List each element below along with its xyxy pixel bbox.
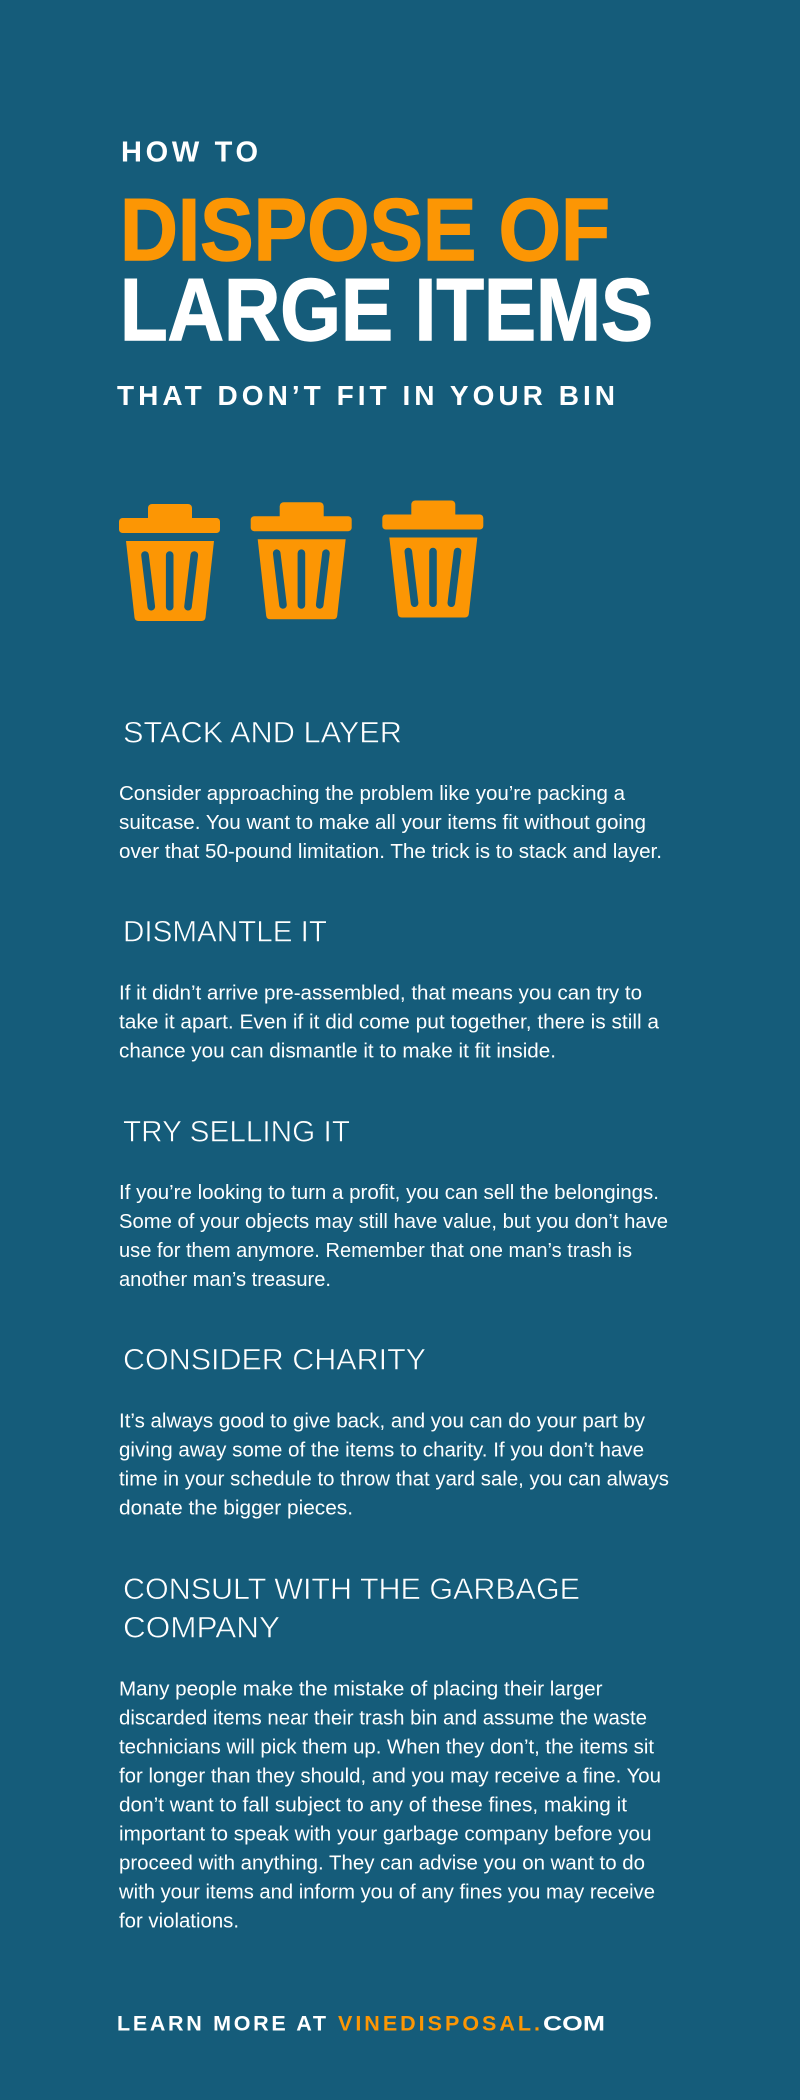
section: consider charity: [119, 1343, 669, 1519]
icon: trash bin 1: [119, 504, 220, 621]
icon: trash bin 3: [382, 500, 483, 618]
body text: Many people make the mistake of placing their larger: [119, 1678, 603, 1700]
body text: with your items and inform you of any fines you may receive: [118, 1881, 655, 1903]
icon: trash bin 2: [251, 502, 352, 619]
body text: important to speak with your garbage company before you: [119, 1823, 652, 1845]
title: how to: HOW TO: [121, 137, 258, 169]
body text: proceed with anything. They can advise you on want to do: [119, 1852, 645, 1874]
footer website suffix: COM: [543, 2012, 605, 2036]
body text: It’s always good to give back, and you can do your part by: [119, 1410, 645, 1432]
section: consult with the garbage company: [118, 1573, 661, 1932]
body text: another man’s treasure.: [119, 1269, 331, 1291]
footer: learn more: [117, 2012, 605, 2036]
body text: chance you can dismantle it to make it fit inside.: [119, 1040, 556, 1062]
body text: for longer than they should, and you may receive a fine. You: [119, 1765, 661, 1787]
heading: [123, 1573, 580, 1645]
heading: CONSULT WITH THE GARBAGE: [123, 1573, 580, 1606]
footer website name: VINEDISPOSAL.: [338, 2012, 540, 2036]
icon row: three trash bins: [119, 500, 483, 621]
heading: STACK AND LAYER: [123, 717, 402, 750]
footer text: LEARN MORE AT: [117, 2012, 326, 2036]
body text: Consider approaching the problem like you’re packing a: [119, 783, 626, 805]
body text: for violations.: [119, 1910, 239, 1932]
body text: [119, 1410, 669, 1519]
body text: time in your schedule to throw that yard sale, you can always: [119, 1468, 669, 1490]
section: stack and layer: [119, 717, 662, 863]
body text: If it didn’t arrive pre-assembled, that means you can try to: [119, 982, 642, 1004]
section: dismantle it: [119, 915, 660, 1062]
body text: [119, 1182, 668, 1291]
heading: CONSIDER CHARITY: [123, 1343, 426, 1376]
subtitle: THAT DON’T FIT IN YOUR BIN: [117, 380, 615, 411]
body text: If you’re looking to turn a profit, you can sell the belongings.: [119, 1182, 659, 1204]
body text: take it apart. Even if it did come put together, there is still a: [119, 1011, 660, 1033]
body text: use for them anymore. Remember that one man’s trash is: [119, 1240, 632, 1262]
heading: COMPANY: [123, 1612, 280, 1645]
heading: DISMANTLE IT: [123, 915, 327, 948]
body text: don’t want to fall subject to any of these fines, making it: [119, 1794, 627, 1816]
body text: Some of your objects may still have value, but you don’t have: [119, 1211, 668, 1233]
body text: discarded items near their trash bin and assume the waste: [119, 1707, 647, 1729]
body text: technicians will pick them up. When they don’t, the items sit: [119, 1736, 654, 1758]
body text: suitcase. You want to make all your items fit without going: [119, 812, 646, 834]
title: dispose of: DISPOSE OF: [120, 180, 610, 279]
section: try selling it: [119, 1115, 668, 1291]
title: large items: LARGE ITEMS: [120, 260, 653, 359]
body text: over that 50-pound limitation. The trick is to stack and layer.: [119, 841, 662, 863]
heading: TRY SELLING IT: [123, 1115, 350, 1148]
body text: [119, 982, 660, 1062]
title block: [117, 137, 653, 411]
body text: [118, 1678, 661, 1932]
body text: donate the bigger pieces.: [119, 1497, 353, 1519]
body text: giving away some of the items to charity. If you don’t have: [119, 1439, 644, 1461]
body text: [119, 783, 662, 863]
